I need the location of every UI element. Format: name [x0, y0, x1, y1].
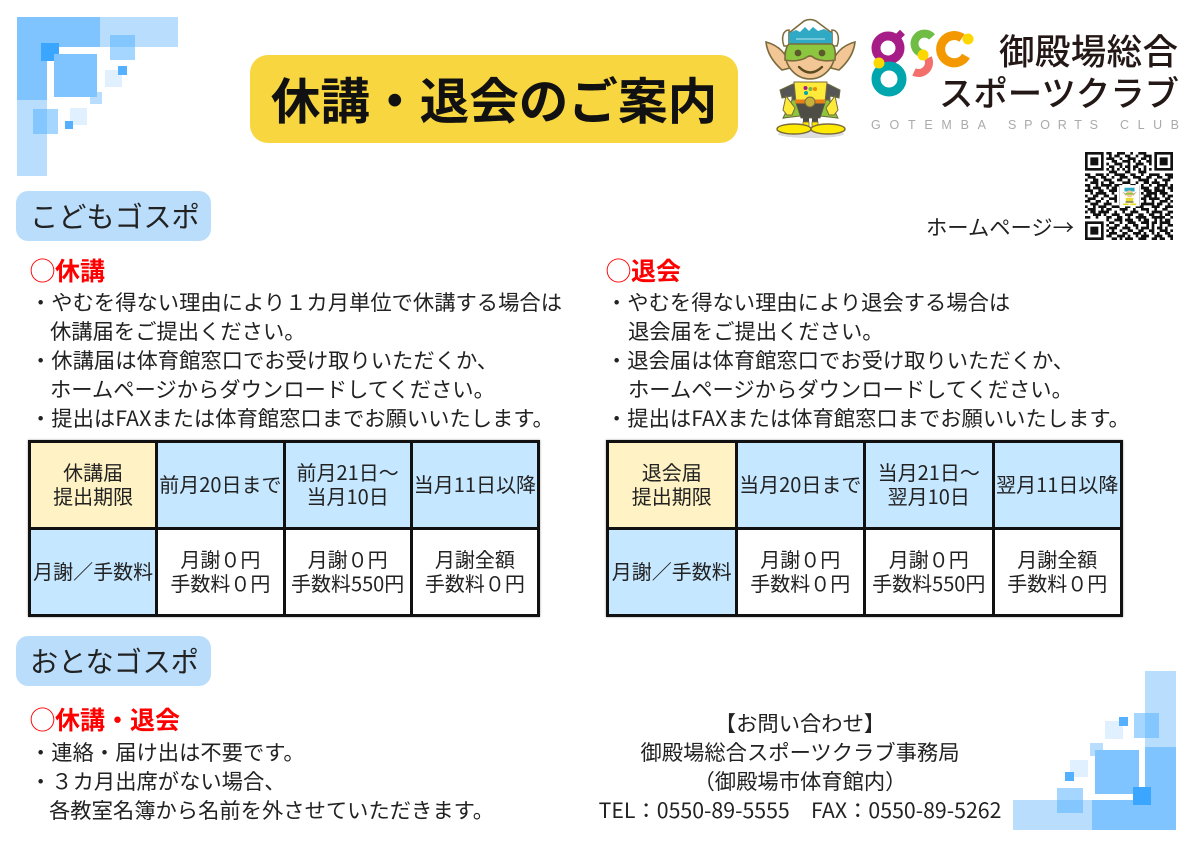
section heading: adults: おとなゴスポ [30, 640, 199, 681]
table: withdrawal deadlines [606, 440, 1123, 617]
text block: withdrawal notes: ・提出はFAXまたは体育館窓口までお願いいたします。 [606, 402, 1130, 433]
logo: GSC Gotemba Sports Club: スポーツクラブ [939, 66, 1179, 116]
text block: withdrawal notes [606, 286, 1130, 433]
text block: withdrawal notes: ・やむを得ない理由により退会する場合は [606, 286, 1010, 317]
table: withdrawal deadlines: 提出期限 [632, 480, 712, 510]
heading: adults leave and withdrawal: ◯休講・退会 [30, 701, 180, 737]
icon: mascot character [765, 18, 856, 138]
text block: leave of absence notes: ・やむを得ない理由により１カ月単位で休講する場合は [30, 286, 562, 317]
text block: adults notes: ・連絡・届け出は不要です。 [30, 736, 305, 767]
table: withdrawal deadlines: 手数料０円 [750, 568, 850, 596]
table: withdrawal deadlines: 月謝０円 [760, 544, 840, 572]
table: leave of absence deadlines: 月謝０円 [308, 544, 388, 572]
homepage label: ホームページ→ [926, 211, 1074, 242]
table: withdrawal deadlines: 翌月10日 [888, 480, 970, 510]
table: withdrawal deadlines: 当月21日～ [878, 456, 980, 486]
table: withdrawal deadlines: 手数料550円 [872, 568, 985, 596]
table: withdrawal deadlines: 退会届 [642, 456, 702, 486]
table: withdrawal deadlines: 月謝全額 [1017, 544, 1097, 572]
table: leave of absence deadlines: 前月20日まで [159, 468, 281, 498]
QR code [1085, 152, 1173, 240]
text block: adults notes: ・３カ月出席がない場合、 [30, 765, 286, 796]
text block: withdrawal notes: 退会届をご提出ください。 [628, 315, 884, 346]
text block: leave of absence notes: ・休講届は体育館窓口でお受け取りいただくか、 [30, 344, 498, 375]
text block: contact: 【お問い合わせ】 [715, 707, 885, 738]
table: leave of absence deadlines: 休講届 [63, 456, 123, 486]
table: withdrawal deadlines: 月謝／手数料 [612, 556, 732, 584]
table: leave of absence deadlines: 手数料550円 [291, 568, 404, 596]
table: withdrawal deadlines: 当月20日まで [739, 468, 861, 498]
table: leave of absence deadlines [28, 440, 540, 617]
title banner: 休講・退会のご案内 [271, 62, 717, 134]
text block: contact [599, 707, 1001, 825]
heading: leave of absence: ◯休講 [30, 252, 105, 288]
table: leave of absence deadlines: 提出期限 [53, 480, 133, 510]
text block: leave of absence notes: 休講届をご提出ください。 [50, 315, 306, 346]
table: leave of absence deadlines: 当月11日以降 [414, 468, 536, 498]
decoration: top-left blue squares [17, 17, 178, 176]
table: withdrawal deadlines: 月謝０円 [889, 544, 969, 572]
text block: leave of absence notes: ホームページからダウンロードしてください。 [50, 373, 495, 404]
logo: GSC Gotemba Sports Club [871, 25, 1179, 132]
logo: GSC Gotemba Sports Club: 御殿場総合 [999, 25, 1178, 75]
text block: contact: TEL：0550-89-5555 FAX：0550-89-5262 [599, 794, 1001, 825]
text block: withdrawal notes: ・退会届は体育館窓口でお受け取りいただくか、 [606, 344, 1074, 375]
text block: leave of absence notes [30, 286, 562, 433]
table: withdrawal deadlines: 手数料０円 [1007, 568, 1107, 596]
section heading: kids: こどもゴスポ [30, 195, 200, 236]
table: withdrawal deadlines: 翌月11日以降 [996, 468, 1118, 498]
table: leave of absence deadlines: 月謝／手数料 [33, 556, 153, 584]
text block: withdrawal notes: ホームページからダウンロードしてください。 [628, 373, 1073, 404]
table: leave of absence deadlines: 月謝０円 [180, 544, 260, 572]
text block: adults notes [30, 736, 494, 825]
logo: GSC Gotemba Sports Club: CLUB [1120, 118, 1179, 132]
table: leave of absence deadlines: 前月21日～ [297, 456, 399, 486]
logo: GSC Gotemba Sports Club: GOTEMBA [871, 118, 987, 132]
logo: GSC Gotemba Sports Club: SPORTS [1008, 118, 1098, 132]
text block: contact: （御殿場市体育館内） [694, 765, 906, 796]
table: leave of absence deadlines: 月謝全額 [435, 544, 515, 572]
table: leave of absence deadlines: 手数料０円 [425, 568, 525, 596]
heading: withdrawal: ◯退会 [606, 252, 681, 288]
table: leave of absence deadlines: 手数料０円 [170, 568, 270, 596]
decoration: bottom-right blue squares [1013, 671, 1176, 830]
text block: adults notes: 各教室名簿から名前を外させていただきます。 [49, 794, 494, 825]
text block: leave of absence notes: ・提出はFAXまたは体育館窓口までお願いいたします。 [30, 402, 554, 433]
text block: contact: 御殿場総合スポーツクラブ事務局 [640, 736, 960, 767]
table: leave of absence deadlines: 当月10日 [307, 480, 389, 510]
